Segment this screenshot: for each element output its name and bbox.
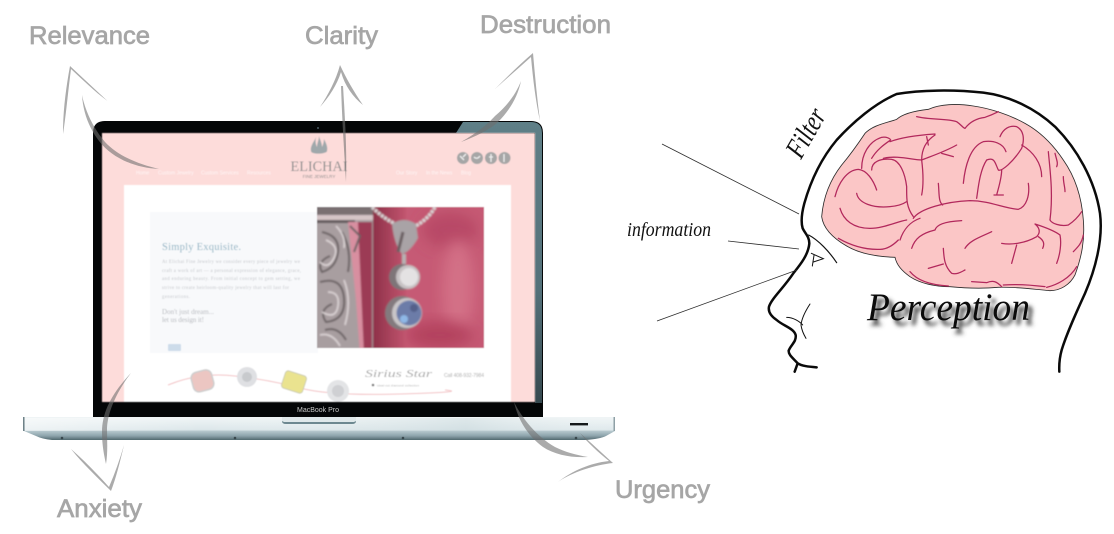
text panel: Simply Exquisite. <box>162 242 241 253</box>
site navigation: Custom Services <box>201 170 239 176</box>
laptop bezel: MacBook Pro <box>297 407 339 414</box>
white content panel <box>124 185 511 402</box>
label: Relevance: Relevance <box>29 22 150 50</box>
arrow: Relevance <box>63 66 159 169</box>
social icons <box>457 152 510 164</box>
arrow: Urgency <box>514 402 613 482</box>
text panel: let us design it! <box>162 316 204 324</box>
label: Clarity: Clarity <box>305 22 379 50</box>
label: Urgency: Urgency <box>615 476 711 504</box>
text panel: Don't just dream... <box>162 308 214 316</box>
jewelry photo <box>316 206 485 349</box>
text panel: strive to create heirloom-quality jewelry that will last for <box>162 286 289 291</box>
arrow: Anxiety <box>71 373 131 491</box>
text panel: craft a work of art — a personal expression of elegance, grace, <box>162 269 301 274</box>
gemstones strip: Call 408-932-7984 <box>444 373 484 379</box>
head outline <box>769 91 1101 372</box>
label: Anxiety: Anxiety <box>57 495 143 523</box>
gemstones strip <box>168 367 484 402</box>
laptop base <box>23 417 615 440</box>
information lines <box>657 144 799 321</box>
brain folds <box>835 112 1083 287</box>
text panel: and enduring beauty. From initial concept to gem setting, we <box>162 277 300 282</box>
label: Filter: Filter <box>779 102 833 164</box>
site logo <box>290 136 348 179</box>
text panel <box>150 212 318 353</box>
site logo: FINE JEWELRY <box>303 174 335 179</box>
nostril <box>787 304 810 338</box>
site navigation: Our Story <box>396 170 418 176</box>
label: information: information <box>627 219 711 241</box>
arrow: Clarity <box>320 65 363 182</box>
site navigation: Custom Jewelry <box>158 170 194 176</box>
eye and brow <box>809 235 837 266</box>
perception diagram <box>627 91 1101 372</box>
gemstones strip: ideal-cut diamond collection <box>377 384 419 388</box>
site navigation: Blog <box>461 170 471 176</box>
site logo: ELICHAI <box>290 159 348 175</box>
site navigation: Home <box>136 170 150 176</box>
label: Destruction: Destruction <box>480 11 611 39</box>
label: Perception: Perception <box>866 286 1030 329</box>
laptop <box>23 121 615 440</box>
text panel: generations. <box>162 295 190 300</box>
site navigation <box>136 170 471 176</box>
brain <box>822 104 1084 291</box>
website screen <box>102 133 535 402</box>
label: Perception: Perception <box>870 291 1034 334</box>
text panel: At Elichai Fine Jewelry we consider every piece of jewelry we <box>162 260 300 265</box>
arrow: Destruction <box>461 53 540 142</box>
laptop bezel <box>93 121 543 417</box>
gemstones strip: Sirius Star <box>365 368 433 380</box>
site navigation: In the News <box>426 170 453 176</box>
site navigation: Resources <box>247 170 271 176</box>
